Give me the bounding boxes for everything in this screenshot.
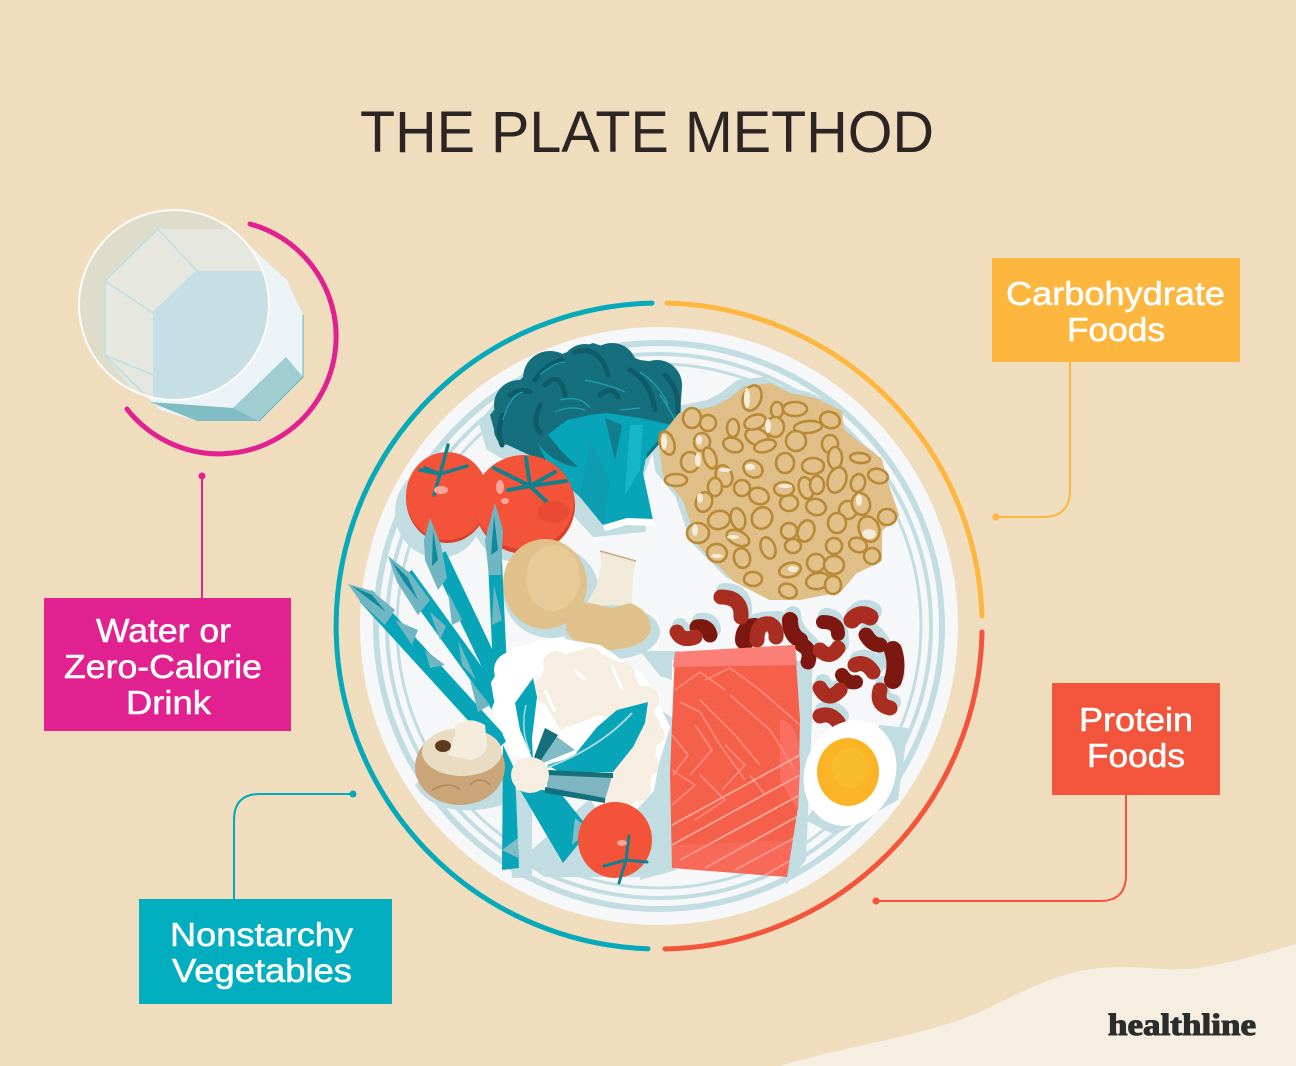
broccoli <box>490 343 682 531</box>
mushrooms upper <box>503 539 651 650</box>
label: vegetables: Vegetables <box>172 952 352 989</box>
mushroom cap <box>566 603 651 650</box>
connector: water <box>198 472 206 598</box>
plate rings <box>336 303 982 949</box>
asparagus tips <box>348 503 503 712</box>
label: carbohydrate: Carbohydrate <box>1006 275 1225 312</box>
label: protein: Foods <box>1087 737 1185 774</box>
label: protein: Protein <box>1079 701 1193 738</box>
label: vegetables: Nonstarchy <box>170 916 354 953</box>
salmon lines <box>672 668 800 820</box>
broccoli florets detail <box>499 351 678 445</box>
plate <box>360 327 958 925</box>
connector: vegetables <box>234 790 356 899</box>
grain highlights <box>661 388 876 572</box>
tomato left <box>406 445 488 543</box>
cauliflower <box>492 640 668 817</box>
cauliflower white base <box>492 640 668 817</box>
grain pieces <box>656 383 896 601</box>
glass bottom facets <box>233 357 303 421</box>
connector: protein <box>872 795 1126 904</box>
label: carbohydrate: Foods <box>1067 311 1165 348</box>
tomato bottom <box>578 802 652 883</box>
background wave <box>780 944 1296 1066</box>
label: water: Water or <box>96 612 231 649</box>
glass top circle <box>80 211 268 399</box>
glass base <box>105 228 303 421</box>
label: water <box>44 598 291 731</box>
title: THE PLATE METHOD <box>360 100 934 165</box>
kidney beans <box>677 597 896 722</box>
cauliflower ribbon stems <box>533 728 575 763</box>
cauliflower florets <box>533 647 665 816</box>
broccoli head <box>490 343 682 460</box>
healthline logo: healthline <box>1108 1007 1256 1042</box>
teal arc <box>336 303 652 949</box>
mushroom lower left <box>415 720 505 805</box>
label: water: Zero-Calorie <box>64 648 262 685</box>
boiled egg <box>788 706 912 840</box>
tomato right <box>474 455 575 554</box>
label: protein <box>1052 683 1220 795</box>
salmon fillet <box>670 645 800 880</box>
label: vegetables <box>139 899 392 1004</box>
water ring arc <box>127 224 336 454</box>
water glass icon <box>70 200 303 421</box>
broccoli stem <box>537 413 672 525</box>
asparagus lower stalks <box>502 745 519 870</box>
grains <box>656 383 897 601</box>
mushroom stem <box>586 551 636 605</box>
tomatoes <box>406 445 575 554</box>
asparagus <box>348 503 590 870</box>
cauliflower leaves <box>515 678 537 760</box>
yellow arc <box>667 303 982 616</box>
grain base <box>660 385 897 598</box>
cauliflower knob <box>511 757 549 793</box>
round mushroom <box>503 539 587 629</box>
label: water: Drink <box>126 684 212 721</box>
label: carbohydrate <box>992 258 1240 362</box>
connector: carbohydrate <box>992 362 1070 520</box>
food shadows <box>395 351 908 885</box>
red arc <box>665 632 982 949</box>
